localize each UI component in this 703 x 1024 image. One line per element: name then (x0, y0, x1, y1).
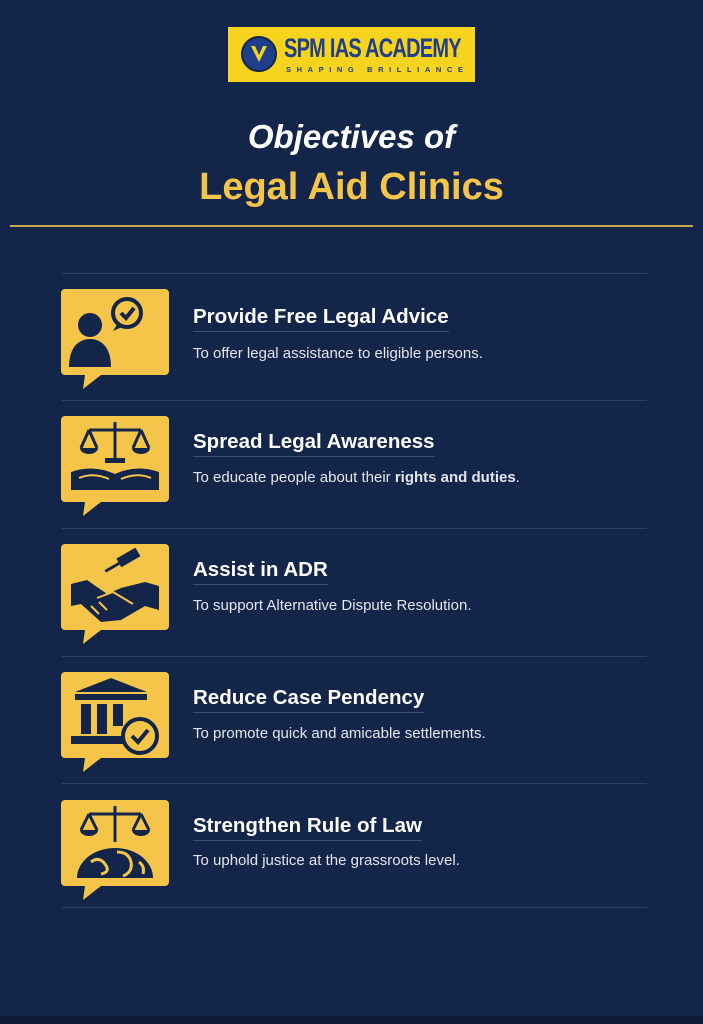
logo emblem (241, 36, 277, 72)
title: Legal Aid Clinics (199, 166, 504, 208)
description: To promote quick and amicable settlements. (193, 725, 486, 742)
icon: scales and book (61, 416, 169, 516)
icon: gavel and handshake (61, 544, 169, 644)
title: Objectives of (248, 118, 455, 155)
item 3: ADR (61, 544, 472, 644)
item 4: case pendency (61, 672, 486, 772)
heading: Reduce Case Pendency (193, 686, 424, 709)
logo banner: SHAPING BRILLIANCE (286, 65, 468, 74)
logo text: SPM IAS ACADEMY (284, 33, 461, 63)
description: To support Alternative Dispute Resolution. (193, 597, 472, 614)
item 5: rule of law (61, 800, 460, 900)
heading: Strengthen Rule of Law (193, 814, 422, 837)
icon: scales over globe (61, 800, 169, 900)
description: To uphold justice at the grassroots level. (193, 852, 460, 869)
heading: Assist in ADR (193, 558, 328, 581)
description: To offer legal assistance to eligible persons. (193, 345, 483, 362)
title (199, 118, 504, 208)
logo banner (228, 27, 475, 82)
description: To educate people about their rights and duties. (193, 469, 520, 486)
item 2: legal awareness (61, 416, 520, 516)
icon: person with speech bubble (61, 289, 169, 389)
heading: Provide Free Legal Advice (193, 305, 449, 328)
heading: Spread Legal Awareness (193, 430, 435, 453)
icon: courthouse with check (61, 672, 169, 772)
item 1: free legal advice (61, 289, 483, 389)
